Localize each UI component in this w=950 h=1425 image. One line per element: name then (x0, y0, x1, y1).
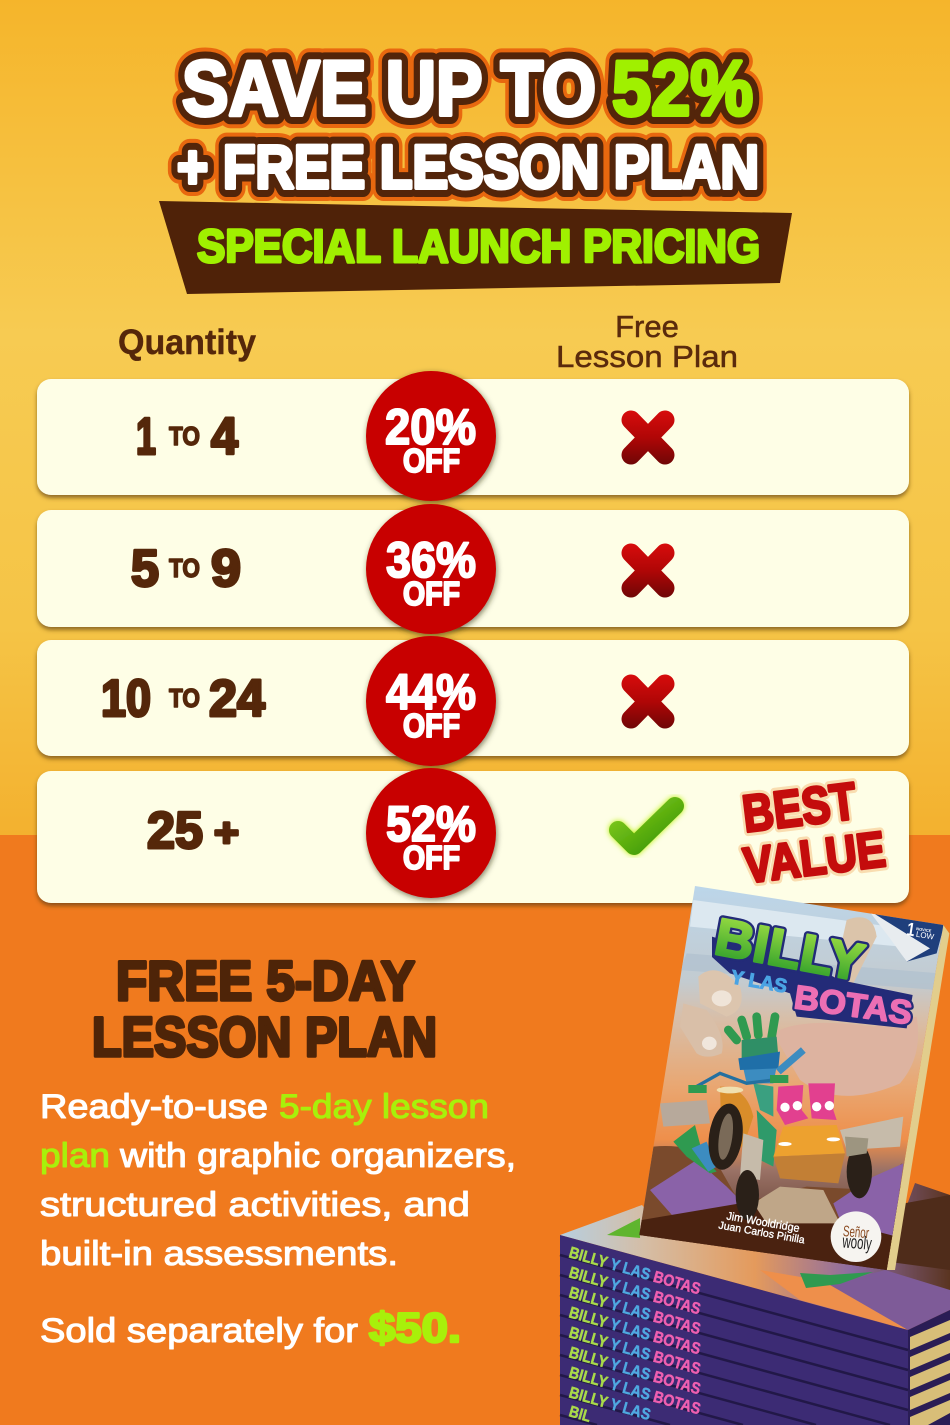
book page edge (887, 925, 949, 1270)
row: 1 to 4: 4 (211, 408, 238, 466)
row: 1 to 4: TO (169, 421, 200, 451)
ground and mountains (639, 1146, 902, 1270)
title: save up to 52%: SAVE UP TO (182, 44, 596, 132)
title: free lesson plan: + FREE LESSON PLAN (177, 133, 759, 201)
icon: x mark row 1 (631, 420, 665, 455)
title: save up to 52%: 52% (612, 44, 753, 132)
spine titles: BILLY Y LAS BOTAS (567, 1285, 703, 1338)
badge: 52% off: 52% (386, 796, 476, 852)
level badge corner: NOVICE (916, 926, 932, 933)
cover title: botas: BOTAS (792, 979, 914, 1032)
spine titles: BILLY Y LAS BOTAS (567, 1345, 703, 1398)
banner: special launch pricing (159, 201, 792, 294)
spine titles: BILLY Y LAS BOTAS (567, 1265, 703, 1318)
hands (833, 917, 877, 983)
standing book (633, 883, 950, 1273)
row: 25 plus: 25 (147, 802, 203, 860)
level badge corner: 1 (905, 918, 917, 940)
cover authors: Jim Wooldridge (725, 1210, 800, 1235)
background: orange lower area (0, 835, 950, 1425)
badge: 36% off: OFF (403, 575, 460, 612)
title: save up to 52%: SAVE UP TO (182, 44, 596, 132)
row: 5 to 9: TO (169, 553, 200, 583)
motorcycle (688, 1073, 788, 1220)
banner: special launch pricing: SPECIAL LAUNCH PRICING (197, 220, 760, 272)
clouds (680, 953, 940, 990)
text block: sold separately price: $50. (369, 1304, 461, 1351)
badge: 44% off (366, 636, 496, 766)
publisher logo: wooly (841, 1230, 873, 1254)
column header: free lesson plan: Free (615, 309, 679, 344)
row: 10 to 24 (37, 640, 909, 756)
cover authors (718, 1212, 804, 1244)
callout: best value: VALUE (741, 821, 888, 894)
text block: lesson plan description: built-in assessments. (40, 1235, 398, 1273)
heading: free 5-day lesson plan: LESSON PLAN (92, 1005, 437, 1068)
title: free lesson plan: + FREE LESSON PLAN (177, 133, 759, 201)
badge: 52% off: OFF (403, 839, 460, 876)
icon: x mark row 3 (631, 684, 665, 719)
boots characters (777, 1083, 837, 1125)
text block: lesson plan description: 5-day lesson (279, 1088, 489, 1126)
badge: 36% off: 36% (386, 532, 476, 588)
title: save up to 52%: SAVE UP TO (182, 44, 596, 132)
title: save up to 52%: 52% (612, 44, 753, 132)
publisher logo: Señor (842, 1223, 870, 1242)
badge: 20% off: 20% (385, 399, 476, 455)
badge: 20% off (366, 371, 496, 501)
spine titles: BILLY Y LAS BOTAS (567, 1245, 703, 1298)
billy character (673, 1017, 803, 1173)
row: 5 to 9: 9 (211, 540, 241, 598)
callout: best value (739, 772, 888, 894)
sidecar (773, 1125, 872, 1198)
spine titles: BILLY Y LAS BOTAS (567, 1305, 703, 1358)
spine titles (567, 1245, 703, 1425)
row: 10 to 24: 24 (209, 670, 265, 728)
spine titles: BILLY Y LAS BOTAS (567, 1365, 703, 1418)
title: free lesson plan: + FREE LESSON PLAN (177, 133, 759, 201)
callout: best value: BEST (739, 772, 860, 844)
text block: sold separately price: Sold separately for (40, 1312, 358, 1350)
text block: lesson plan description: Ready-to-use (40, 1088, 268, 1126)
cover title backing (712, 937, 913, 1028)
book cover art (633, 883, 950, 1273)
badge: 44% off: 44% (386, 664, 476, 720)
row: 10 to 24: TO (169, 683, 200, 713)
cover title: y las: Y LAS (729, 967, 789, 998)
badge: 36% off (366, 504, 496, 634)
text block: lesson plan description: structured activities, and (40, 1186, 470, 1224)
icon: green check mark (618, 806, 675, 846)
text block: sold separately price (40, 1304, 461, 1351)
icon: x mark row 2 (631, 553, 665, 588)
book stack (560, 1183, 950, 1425)
column header: free lesson plan (556, 309, 738, 374)
callout: best value: BEST (739, 772, 860, 844)
page edges (908, 1310, 950, 1425)
badge: 44% off: OFF (403, 707, 460, 744)
row: 1 to 4 (37, 379, 909, 495)
cover authors: Juan Carlos Pinilla (717, 1219, 806, 1246)
cover title: billy: BILLY (710, 908, 869, 993)
callout: best value: VALUE (741, 821, 888, 894)
spines (560, 1235, 908, 1425)
row: 1 to 4: 1 (136, 408, 156, 466)
spine titles: BILLY Y LAS BOTAS (567, 1325, 703, 1378)
column header: quantity: Quantity (118, 323, 257, 362)
row: 10 to 24: 10 (101, 670, 151, 728)
heading: free 5-day lesson plan (92, 949, 437, 1068)
background: yellow upper area (0, 0, 950, 835)
text block: lesson plan description: plan (40, 1137, 110, 1175)
text block: lesson plan description (40, 1088, 516, 1273)
row: 5 to 9 (37, 510, 909, 627)
heading: free 5-day lesson plan: FREE 5-DAY (116, 949, 415, 1012)
title: save up to 52%: 52% (612, 44, 753, 132)
level badge corner: LOW (915, 930, 935, 942)
cover title: botas: BOTAS (792, 979, 914, 1032)
text block: lesson plan description: with graphic organizers, (119, 1137, 516, 1175)
level badge corner (871, 914, 944, 962)
spine titles: BILLY Y LAS (567, 1385, 653, 1424)
column header: free lesson plan: Lesson Plan (556, 339, 738, 374)
stack top face (560, 1183, 950, 1330)
row: 25 plus: + (214, 811, 239, 855)
badge: 52% off (366, 768, 496, 898)
row: 5 to 9: 5 (131, 540, 159, 598)
publisher logo (831, 1211, 881, 1262)
cover title: billy: BILLY (710, 908, 869, 993)
badge: 20% off: OFF (403, 442, 460, 479)
row: 25 plus (37, 771, 909, 903)
